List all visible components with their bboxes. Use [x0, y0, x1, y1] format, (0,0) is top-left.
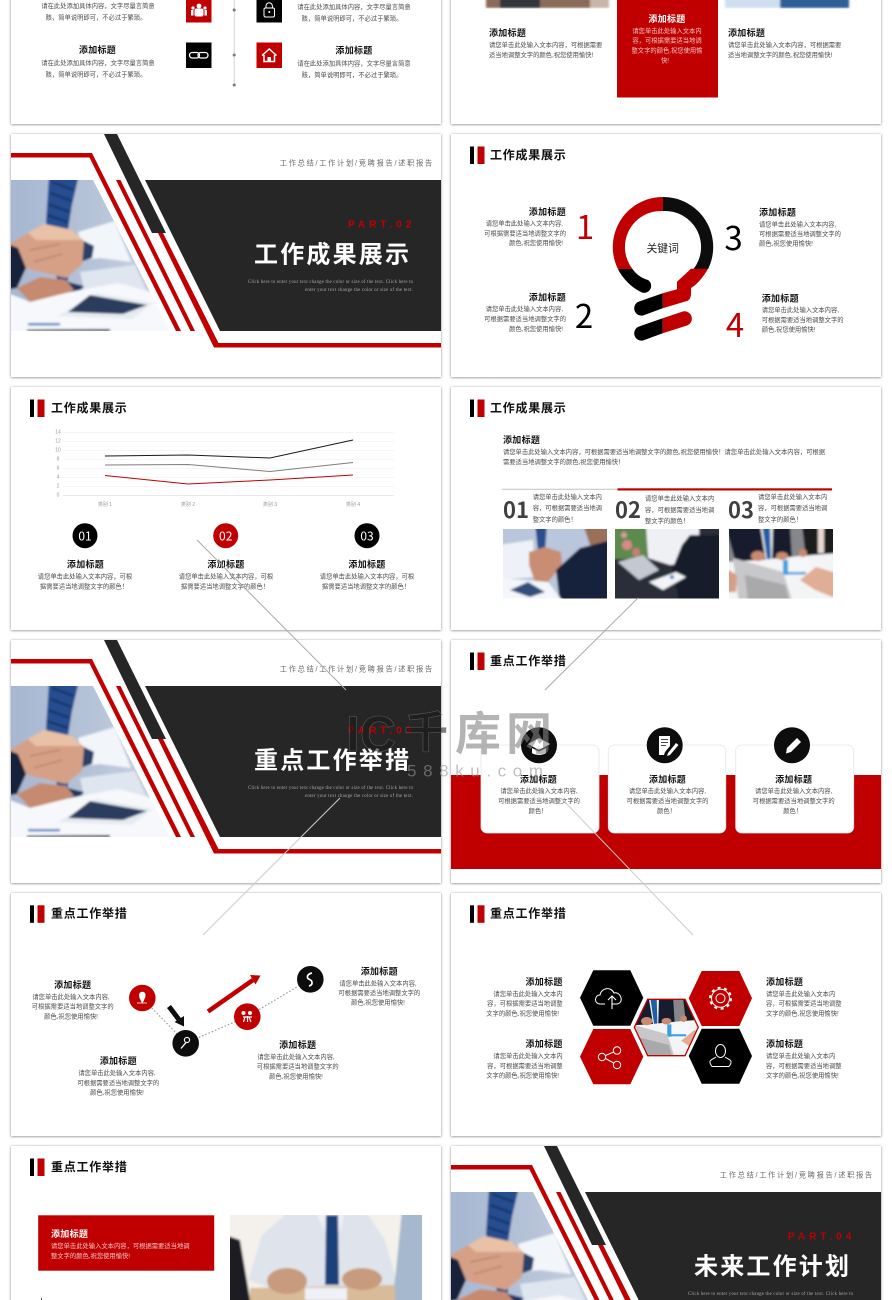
- text block right: 适当地调整文字的颜色,祝您使用愉快!: [728, 50, 832, 59]
- text: top left: 请在此处添加具体内容，文字尽量言简意: [41, 1, 155, 10]
- text: lower right: [297, 44, 411, 79]
- photo: handshake: [11, 686, 170, 837]
- red band: [451, 775, 881, 869]
- heading: 工作成果展示: [490, 147, 567, 162]
- item 01: 整文字的颜色！: [533, 514, 577, 524]
- red outline stripes: [11, 659, 441, 854]
- card 3: 请您单击此处输入文本内容,: [755, 786, 833, 795]
- card 2: 可根据需要适当地调整文字的: [627, 796, 708, 805]
- item 3: [724, 206, 841, 260]
- text 3: 可根据需要适当地调整文字的: [257, 1062, 339, 1070]
- item 1: 请您单击此处输入文本内容,: [486, 218, 563, 228]
- text right bottom: 容，可根据需要适当地调整: [766, 1061, 842, 1070]
- photo: handshake: [11, 180, 170, 331]
- line chart: 8: [57, 456, 60, 462]
- line chart: 4: [57, 474, 60, 480]
- heading: 工作成果展示: [51, 400, 128, 415]
- watermark: IC: [346, 706, 396, 762]
- item 1: 添加标题: [529, 206, 566, 217]
- text 4: 可根据需要适当地调整文字的: [338, 988, 420, 997]
- item 01: 请您单击此处输入文本内: [533, 492, 602, 501]
- slide: path diagram: [11, 893, 441, 1136]
- card 3: [736, 727, 854, 833]
- subtitle: Click here to enter your text change the color or size of the text. Click here to: [688, 1292, 854, 1297]
- heading: [30, 400, 128, 417]
- text block left: [489, 27, 602, 59]
- black arrow: [169, 1006, 184, 1026]
- hexagon: share: [580, 1029, 643, 1084]
- heading: [30, 1158, 128, 1176]
- dark diagonal bar: [544, 1146, 606, 1245]
- item 03: 容，可根据需要适当地调: [758, 503, 827, 512]
- slide: hexagons: [451, 893, 881, 1136]
- photo strip left: [486, 0, 609, 8]
- column 02: [179, 523, 274, 590]
- icon: link: [186, 42, 212, 68]
- text: top left: [41, 1, 155, 21]
- item 4: 添加标题: [762, 292, 799, 303]
- nav text: 工作总结/工作计划/竞聘报告/述职报告: [720, 1170, 874, 1180]
- subtitle: Click here to enter your text change the color or size of the text. Click here to: [248, 786, 414, 791]
- heading: [470, 905, 567, 923]
- slide: three photos: [451, 387, 881, 630]
- column 03: [320, 523, 415, 590]
- text right bottom: 添加标题: [766, 1038, 803, 1049]
- card 1: 请您单击此处输入文本内容,: [500, 786, 578, 795]
- intro text: 请您单击此处输入文本内容，可根据需要适当地调整文字的颜色,祝您使用愉快！请您单击此处输入文本内容，可根据: [503, 447, 826, 456]
- part label: PART.03: [348, 726, 415, 736]
- text block right: [728, 27, 841, 59]
- item 4: 4: [726, 299, 744, 347]
- text: lower right: 请在此处添加具体内容，文字尽量言简意: [297, 58, 411, 68]
- text right top: [766, 976, 842, 1018]
- subtitle: [248, 280, 414, 293]
- item 2: 2: [575, 290, 593, 338]
- text 1: [32, 979, 114, 1020]
- red column: 快!: [661, 56, 669, 64]
- item 3: 3: [724, 212, 743, 260]
- item 4: 请您单击此处输入文本内容,: [762, 305, 839, 314]
- text block left: 适当地调整文字的颜色,祝您使用愉快!: [489, 50, 593, 59]
- text 1: 颜色,祝您使用愉快!: [44, 1012, 98, 1020]
- line chart: 14: [55, 429, 61, 435]
- line chart: 类别 2: [181, 501, 195, 508]
- column 01: 添加标题: [67, 558, 104, 569]
- dark diagonal bar: [104, 134, 166, 233]
- dark panel: [145, 180, 441, 331]
- photo 1: [503, 529, 607, 598]
- photo 3: [729, 529, 833, 598]
- red callout: 整文字的颜色,祝您使用愉快!: [51, 1251, 130, 1260]
- small mark: [41, 1298, 42, 1300]
- text: top right: [297, 2, 411, 22]
- column 01: 01: [78, 528, 92, 544]
- text 2: 请您单击此处输入文本内容,: [78, 1068, 156, 1077]
- item 4: 可根据需要适当地调整文字的: [762, 315, 844, 324]
- text: lower right: 赅，简单说明即可，不必过于繁琐。: [302, 70, 402, 79]
- text: lower left: 请在此处添加具体内容，文字尽量言简意: [41, 58, 155, 67]
- item 03: [728, 492, 827, 525]
- watermark: 千: [404, 708, 448, 758]
- slide: red callout and photo: [11, 1146, 441, 1300]
- text 1: 添加标题: [54, 979, 91, 990]
- icon: people: [186, 0, 212, 22]
- title: 工作成果展示: [254, 242, 411, 268]
- item 02: 整文字的颜色！: [645, 516, 689, 525]
- card 1: [481, 727, 599, 833]
- red column: 容，可根据需要适当地调: [632, 36, 702, 44]
- icon: lock: [256, 0, 282, 22]
- card 1: 颜色！: [529, 806, 547, 815]
- text left bottom: 文字的颜色,祝您使用愉快!: [486, 1070, 559, 1080]
- item 3: 请您单击此处输入文本内容,: [759, 220, 837, 228]
- node 2: [172, 1030, 199, 1057]
- text block right: 添加标题: [728, 27, 765, 38]
- text right top: 请您单击此处输入文本内: [766, 989, 835, 998]
- slide: cover part 04: [445, 1146, 881, 1300]
- red callout: 请您单击此处输入文本内容，可根据需要适当地调: [51, 1241, 190, 1250]
- red callout: 添加标题: [51, 1228, 88, 1239]
- heading: 重点工作举措: [490, 906, 567, 921]
- watermark: 库网: [455, 708, 552, 760]
- red outline stripes: [11, 153, 441, 348]
- text right bottom: [766, 1038, 842, 1080]
- part label: PART.02: [348, 220, 415, 230]
- text 1: 请您单击此处输入文本内容,: [32, 992, 110, 1001]
- item 03: 03: [728, 493, 754, 525]
- item 01: [503, 492, 602, 525]
- text left bottom: 请您单击此处输入文本内: [493, 1051, 563, 1060]
- text right bottom: 文字的颜色,祝您使用愉快!: [766, 1070, 839, 1080]
- item 2: 可根据需要适当地调整文字的: [484, 314, 566, 323]
- hexagon: photo: [634, 998, 699, 1056]
- item 2: [484, 290, 593, 338]
- dark panel: [145, 686, 441, 837]
- heading: 工作成果展示: [490, 400, 567, 415]
- text 4: 颜色,祝您使用愉快!: [351, 998, 405, 1006]
- text 3: 请您单击此处输入文本内容,: [257, 1052, 335, 1061]
- text left top: 添加标题: [525, 976, 563, 987]
- text right top: 添加标题: [766, 976, 803, 987]
- node 4: [297, 966, 324, 993]
- item 03: 整文字的颜色！: [758, 514, 802, 524]
- text: lower right: 添加标题: [335, 44, 373, 56]
- divider lines: [502, 488, 832, 490]
- column 03: 添加标题: [348, 558, 386, 569]
- item 1: 颜色,祝您使用愉快!: [509, 238, 563, 247]
- item 02: 请您单击此处输入文本内: [645, 494, 714, 502]
- item 4: 颜色,祝您使用愉快!: [762, 324, 816, 334]
- card 1: 可根据需要适当地调整文字的: [498, 796, 580, 805]
- lightbulb chart: [613, 197, 713, 341]
- heading: 重点工作举措: [51, 906, 128, 921]
- card 2: [608, 727, 726, 833]
- text right bottom: 请您单击此处输入文本内: [766, 1051, 835, 1060]
- text 2: 颜色,祝您使用愉快!: [90, 1088, 144, 1096]
- text left bottom: 添加标题: [525, 1038, 563, 1049]
- item 03: 请您单击此处输入文本内: [758, 492, 827, 501]
- line chart: 6: [57, 465, 60, 471]
- slide: cover part 02: [5, 134, 441, 377]
- photo: handshake: [451, 1192, 588, 1300]
- subtitle: [248, 786, 414, 799]
- column 03: 请您单击此处输入文本内容，可根: [320, 572, 415, 580]
- nav text: 工作总结/工作计划/竞聘报告/述职报告: [280, 158, 434, 168]
- red column: 添加标题: [648, 13, 686, 24]
- text: top left: 赅，简单说明即可，不必过于繁琐。: [46, 12, 146, 22]
- heading: 重点工作举措: [51, 1159, 128, 1174]
- text 2: 添加标题: [100, 1055, 137, 1066]
- text: lower left: 添加标题: [79, 44, 116, 55]
- item 2: 添加标题: [529, 291, 566, 302]
- lightbulb chart: 关键词: [647, 241, 679, 255]
- line chart: 类别 4: [346, 501, 360, 508]
- red column: 请您单击此处输入文本内: [632, 26, 702, 35]
- intro text: 需要适当地调整文字的颜色,祝您使用愉快！: [503, 457, 624, 466]
- line chart: [55, 429, 394, 508]
- heading: [30, 905, 128, 923]
- heading: [470, 652, 567, 670]
- watermark: [197, 540, 693, 935]
- dark panel: [585, 1192, 881, 1300]
- item 3: 颜色,祝您使用愉快!: [759, 238, 813, 248]
- text left top: 容，可根据需要适当地调整: [487, 998, 563, 1008]
- text: lower left: [41, 44, 155, 78]
- item 02: 02: [615, 493, 641, 525]
- text left bottom: [486, 1038, 563, 1080]
- text block left: 请您单击此处输入文本内容，可根据需要: [489, 40, 602, 49]
- photo strip right: [725, 0, 849, 8]
- column 02: 添加标题: [207, 558, 245, 569]
- text block left: 添加标题: [489, 27, 526, 38]
- line chart: 12: [55, 438, 61, 444]
- red callout: [38, 1215, 214, 1271]
- card 2: 请您单击此处输入文本内容,: [629, 786, 706, 795]
- text 1: 可根据需要适当地调整文字的: [32, 1002, 114, 1010]
- line chart: 0: [57, 492, 60, 498]
- text 3: 颜色,祝您使用愉快!: [269, 1072, 323, 1080]
- icon: home: [256, 42, 282, 68]
- item 4: [726, 292, 844, 347]
- red outline stripes: [451, 1165, 881, 1300]
- slide: partial timeline: [11, 0, 441, 124]
- red column: 整文字的颜色,祝您使用愉: [631, 46, 703, 54]
- text: top right: 请在此处添加具体内容，文字尽量言简意: [297, 2, 411, 11]
- item 1: 1: [576, 201, 594, 249]
- watermark: 588ku.com: [407, 762, 543, 780]
- card 3: 可根据需要适当地调整文字的: [753, 796, 835, 805]
- heading: [470, 400, 567, 417]
- column 02: 02: [219, 528, 233, 544]
- item 1: [484, 201, 594, 249]
- column 03: 据需要适当地调整文字的颜色！: [322, 582, 410, 590]
- text right top: 容，可根据需要适当地调整: [766, 998, 842, 1008]
- item 01: 01: [503, 493, 529, 525]
- card 3: 添加标题: [775, 773, 812, 784]
- item 3: 可根据需要适当地调整文字的: [759, 229, 841, 238]
- text: lower left: 赅，简单说明即可，不必过于繁琐。: [46, 70, 146, 78]
- text 2: 可根据需要适当地调整文字的: [77, 1078, 159, 1087]
- column 01: 据需要适当地调整文字的颜色！: [40, 582, 128, 590]
- text block right: 请您单击此处输入文本内容，可根据需要: [728, 40, 841, 49]
- subtitle: enter your text change the color or size of the text.: [305, 288, 413, 293]
- item 2: 请您单击此处输入文本内容,: [486, 304, 563, 313]
- line chart: 2: [57, 483, 60, 489]
- card 3: 颜色！: [783, 806, 802, 815]
- item 1: 可根据需要适当地调整文字的: [484, 228, 566, 238]
- slide: partial three columns: [451, 0, 881, 124]
- item 01: 容，可根据需要适当地调: [533, 503, 602, 512]
- hexagon: cloud: [580, 970, 643, 1026]
- timeline axis: [233, 0, 236, 86]
- column 01: 请您单击此处输入文本内容，可根: [38, 572, 133, 580]
- text 4: [338, 965, 420, 1006]
- title: 重点工作举措: [254, 748, 411, 774]
- dark diagonal bar: [104, 640, 166, 739]
- column 02: 据需要适当地调整文字的颜色！: [181, 582, 269, 590]
- red column: [617, 0, 718, 98]
- nav text: 工作总结/工作计划/竞聘报告/述职报告: [280, 664, 434, 674]
- card 2: 颜色！: [657, 806, 676, 815]
- intro text: 添加标题: [503, 434, 540, 445]
- slide: cover part 03: [5, 640, 441, 883]
- heading: 重点工作举措: [490, 653, 567, 668]
- slide: three cards: [451, 640, 881, 883]
- title: 未来工作计划: [694, 1254, 851, 1280]
- heading: [470, 146, 567, 164]
- node 3: [234, 1003, 261, 1030]
- column 02: 请您单击此处输入文本内容，可根: [179, 572, 274, 580]
- part label: PART.04: [788, 1232, 855, 1242]
- photo 2: [615, 529, 719, 598]
- red arrow: [208, 975, 260, 1012]
- hexagon: user: [689, 1029, 752, 1084]
- line chart: 类别 1: [98, 501, 112, 508]
- card 1: 添加标题: [520, 773, 557, 784]
- text left bottom: 容，可根据需要适当地调整: [487, 1061, 563, 1070]
- text 2: [77, 1055, 159, 1096]
- text 3: 添加标题: [279, 1039, 316, 1050]
- card 2: 添加标题: [649, 773, 686, 784]
- item 3: 添加标题: [759, 206, 796, 217]
- text left top: 请您单击此处输入文本内: [493, 989, 563, 998]
- node 1: [129, 985, 156, 1011]
- hexagon: gear: [689, 971, 752, 1026]
- text 4: 添加标题: [361, 965, 398, 976]
- text left top: 文字的颜色,祝您使用愉快!: [486, 1008, 559, 1018]
- text right top: 文字的颜色,祝您使用愉快!: [766, 1008, 839, 1018]
- intro text: [503, 434, 826, 466]
- text left top: [486, 976, 563, 1018]
- column 01: [38, 523, 133, 590]
- subtitle: Click here to enter your text change the color or size of the text. Click here to: [248, 280, 414, 285]
- line chart: 类别 3: [263, 501, 277, 508]
- text 4: 请您单击此处输入文本内容,: [339, 978, 417, 988]
- item 02: [615, 493, 714, 525]
- subtitle: enter your text change the color or size of the text.: [305, 794, 413, 799]
- slide: lightbulb: [451, 134, 881, 377]
- slide: line chart: [11, 387, 441, 630]
- photo: office worker: [230, 1215, 422, 1300]
- line chart: 10: [55, 447, 61, 453]
- item 02: 容，可根据需要适当地调: [645, 505, 714, 514]
- text: top right: 赅，简单说明即可，不必过于繁琐。: [302, 14, 402, 22]
- dotted path: [142, 979, 310, 1043]
- column 03: 03: [360, 528, 374, 544]
- text 3: [257, 1039, 339, 1080]
- item 2: 颜色,祝您使用愉快!: [509, 324, 563, 333]
